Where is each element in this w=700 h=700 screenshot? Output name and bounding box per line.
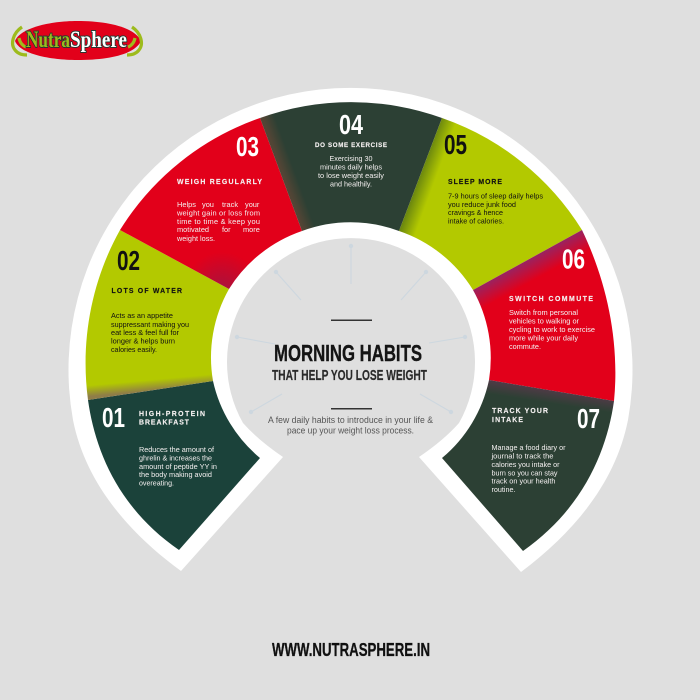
number 05: 05 [444, 129, 467, 160]
number 01: 01 [102, 402, 125, 433]
panel: 01 high-protein breakfast [88, 381, 260, 550]
number 03: 03 [236, 131, 259, 162]
heading: SWITCH COMMUTE [509, 296, 593, 303]
body text: cravings & hence [448, 208, 503, 217]
body text: cycling to work to exercise [509, 325, 595, 334]
panel: 07 track your intake [442, 380, 614, 551]
body text: vehicles to walking or [509, 316, 580, 326]
logo: NutraSphere [13, 21, 141, 60]
panel: 02 lots of water [86, 230, 229, 400]
body text [490, 443, 566, 494]
body text: Manage a food diary or [492, 443, 566, 452]
body text: more [243, 225, 260, 234]
white horseshoe frame [68, 88, 633, 572]
body text: for [222, 225, 231, 234]
heading: LOTS OF WATER [112, 288, 182, 295]
body text: track [222, 200, 238, 209]
body text: your [245, 200, 260, 209]
center decorative rays [235, 244, 467, 414]
body text: calories easily. [111, 345, 157, 354]
panel: 04 do some exercise [260, 102, 442, 231]
body text: journal to track the [490, 452, 554, 460]
body text: weight gain or loss from [176, 208, 260, 218]
heading: DO SOME EXERCISE [315, 142, 387, 149]
number 02: 02 [117, 245, 140, 276]
subtitle: THAT HELP YOU LOSE WEIGHT [272, 367, 427, 384]
body text: eat less & feel full for [111, 328, 180, 337]
body text: you reduce junk food [448, 200, 516, 209]
heading [139, 411, 205, 426]
title: MORNING HABITS [274, 340, 422, 366]
body text [318, 154, 384, 188]
body text [139, 445, 217, 488]
body text: calories you intake or [492, 460, 560, 469]
body text: you [202, 200, 214, 209]
heading: BREAKFAST [139, 420, 190, 426]
heading [492, 408, 548, 424]
body text: track on your health [492, 476, 556, 486]
body text: and healthily. [330, 180, 372, 188]
body text: 7-9 hours of sleep daily helps [448, 192, 543, 200]
panel: 03 weigh regularly [120, 118, 302, 289]
body text: weight loss. [176, 234, 215, 243]
logo: NutraSphere: Nutra [26, 27, 70, 52]
description: pace up your weight loss process. [287, 426, 414, 436]
body text: amount of peptide YY in [139, 462, 217, 471]
body text: overeating. [139, 478, 174, 488]
description: A few daily habits to introduce in your life & [268, 415, 434, 426]
panel: 05 sleep more [399, 118, 582, 290]
body text: Reduces the amount of [139, 445, 215, 454]
body text [448, 192, 543, 226]
body text: to lose weight easily [318, 171, 384, 180]
heading: INTAKE [492, 417, 523, 424]
number 04: 04 [339, 109, 364, 140]
heading: HIGH-PROTEIN [139, 411, 205, 418]
logo: NutraSphere: Sphere [70, 27, 127, 52]
body text: longer & helps burn [111, 336, 175, 346]
body text: the body making avoid [139, 470, 212, 479]
body text [176, 200, 260, 243]
panel: 06 switch commute [473, 230, 615, 401]
body text: routine. [492, 485, 516, 494]
body text: burn so you can stay [492, 468, 558, 478]
body text: Helps [177, 200, 196, 209]
body text: motivated [177, 225, 209, 234]
body text [509, 308, 595, 351]
center title block [268, 320, 434, 436]
website url: WWW.NUTRASPHERE.IN [272, 639, 430, 660]
number 07: 07 [577, 403, 600, 434]
description [268, 415, 434, 436]
body text: Switch from personal [509, 308, 578, 317]
body text: minutes daily helps [320, 162, 382, 172]
heading: WEIGH REGULARLY [177, 179, 262, 186]
number 06: 06 [562, 244, 585, 274]
body text: suppressant making you [111, 320, 189, 329]
body text: intake of calories. [448, 216, 504, 226]
body text [111, 311, 189, 354]
heading: SLEEP MORE [448, 179, 502, 186]
body text: more while your daily [509, 334, 578, 342]
heading: TRACK YOUR [492, 408, 548, 415]
body text: Exercising 30 [330, 154, 372, 163]
body text: commute. [509, 342, 541, 351]
body text: ghrelin & increases the [139, 454, 212, 462]
body text: time to time & keep you [177, 217, 260, 226]
body text: Acts as an appetite [111, 311, 173, 320]
